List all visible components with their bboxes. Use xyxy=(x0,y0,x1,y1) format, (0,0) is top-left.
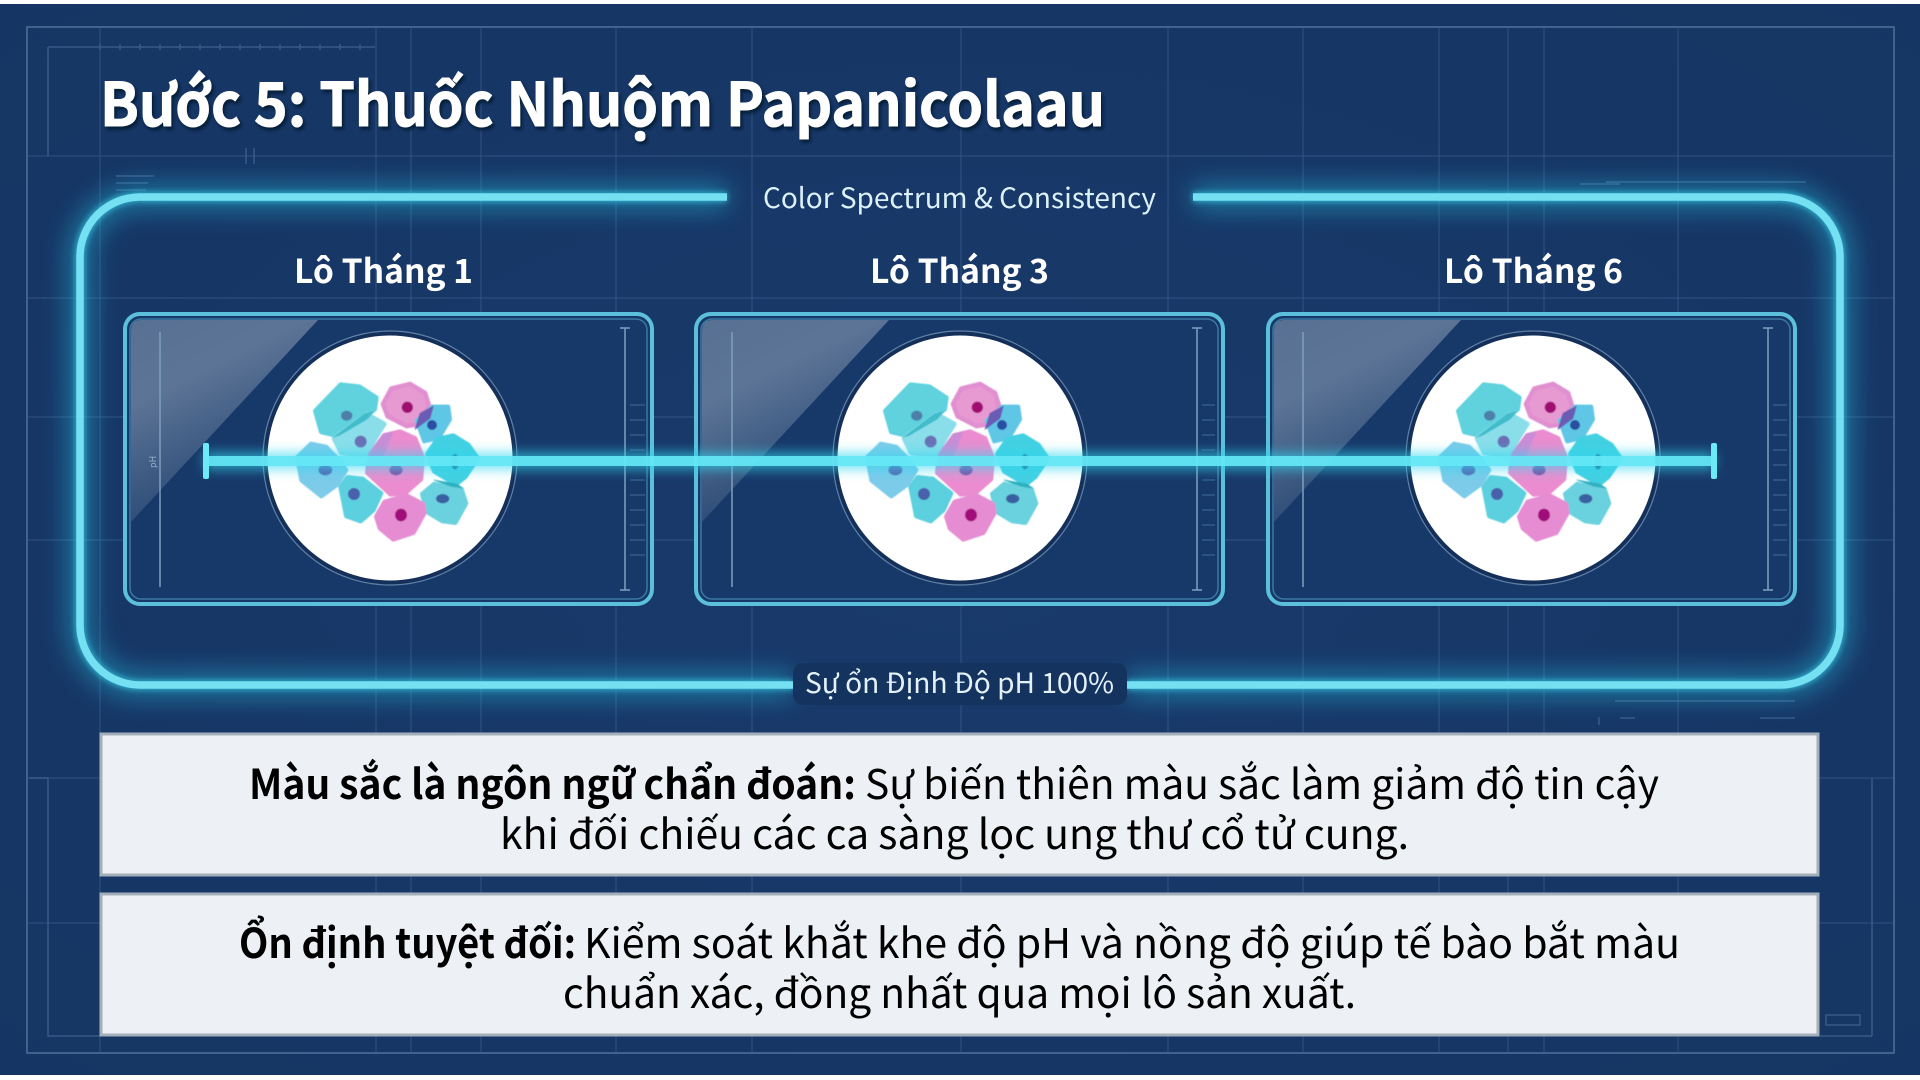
callout: color is the diagnostic language: khi đối chiếu các ca sàng lọc ung thư cổ tử cung. xyxy=(500,801,1409,861)
scale ticks xyxy=(630,405,645,555)
panel: month 3 slide xyxy=(696,314,1223,604)
frame heading: color spectrum and consistency: Color Spectrum & Consistency xyxy=(763,177,1156,217)
consistency beam across all slides xyxy=(203,443,1717,479)
microscope circle xyxy=(833,331,1087,585)
pH stability badge: Sự ổn Định Độ pH 100% xyxy=(805,662,1114,702)
callout: absolute stability xyxy=(101,894,1818,1035)
tiny pH label: pH xyxy=(146,456,159,468)
callout: color is the diagnostic language: Màu sắc là ngôn ngữ chẩn đoán: xyxy=(249,751,856,811)
callout: color is the diagnostic language: Sự biến thiên màu sắc làm giảm độ tin cậy xyxy=(865,751,1659,811)
batch label: month 6: Lô Tháng 6 xyxy=(1444,245,1623,293)
glass reflection xyxy=(131,320,318,522)
callout: absolute stability: Kiểm soát khắt khe độ pH và nồng độ giúp tế bào bắt màu xyxy=(584,910,1680,970)
callout: color is the diagnostic language xyxy=(101,734,1818,875)
scale ticks xyxy=(1202,405,1215,555)
batch label: month 1: Lô Tháng 1 xyxy=(294,245,473,293)
microscope circle xyxy=(1406,331,1660,585)
title: Bước 5: Thuốc Nhuộm Papanicolaau xyxy=(100,57,1105,144)
panel: month 1 slide xyxy=(125,314,652,604)
callout: absolute stability: chuẩn xác, đồng nhất qua mọi lô sản xuất. xyxy=(563,960,1356,1020)
batch label: month 3: Lô Tháng 3 xyxy=(870,245,1049,293)
glass reflection xyxy=(1274,320,1461,522)
panel: color spectrum frame xyxy=(80,197,1840,685)
glass reflection xyxy=(702,320,889,522)
scale ticks xyxy=(1773,405,1787,555)
panel: month 6 slide xyxy=(1268,314,1795,604)
callout: absolute stability: Ổn định tuyệt đối: xyxy=(239,910,576,970)
microscope circle xyxy=(263,331,517,585)
